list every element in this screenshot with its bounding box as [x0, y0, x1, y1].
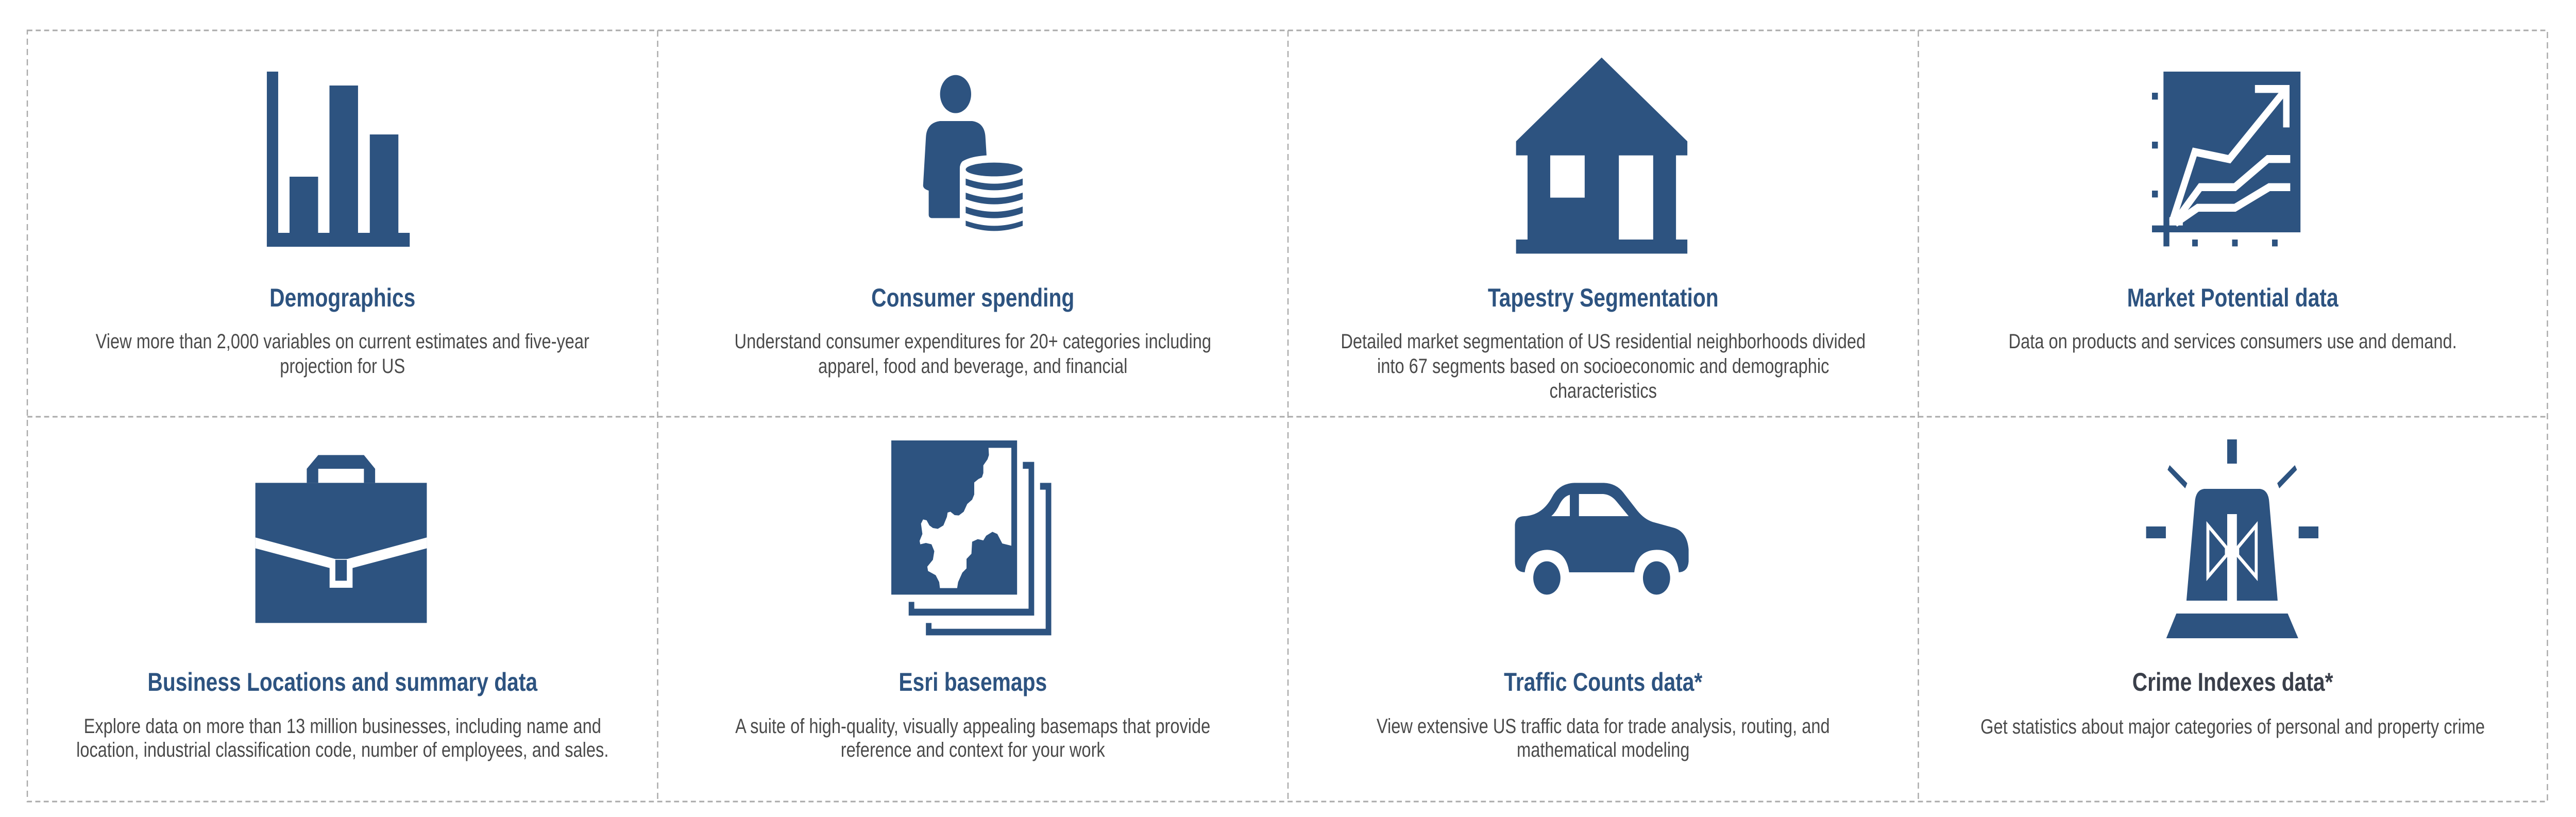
- panel: traffic counts: [1377, 483, 1830, 761]
- heading: Market Potential data: Market Potential data: [2127, 283, 2338, 312]
- panel: demographics: [96, 72, 589, 378]
- panel: esri basemaps: [735, 440, 1210, 761]
- heading: Business Locations and summary data: Business Locations and summary data: [147, 668, 538, 696]
- text block: business description: location, industrial classification code, number of employees, and sales.: [76, 738, 608, 761]
- text block: business description: Explore data on more than 13 million businesses, including name and: [84, 714, 601, 738]
- text block: market potential description: Data on products and services consumers use and demand.: [2009, 330, 2457, 353]
- heading: Crime Indexes data*: Crime Indexes data*: [2132, 668, 2333, 696]
- text block: consumer spending description: Understand consumer expenditures for 20+ categories including: [735, 330, 1211, 353]
- icon: bar chart: [267, 72, 410, 247]
- icon: siren: [2146, 439, 2318, 638]
- icon: house: [1516, 58, 1687, 253]
- text block: crime description: Get statistics about major categories of personal and property crime: [1980, 715, 2485, 738]
- text block: tapestry description: Detailed market segmentation of US residential neighborhoods divided: [1341, 330, 1866, 353]
- text block: demographics description: View more than 2,000 variables on current estimates and five-year: [96, 330, 589, 353]
- icon: stacked maps: [891, 440, 1052, 635]
- text block: basemaps description: reference and context for your work: [841, 738, 1105, 761]
- text block: tapestry description: characteristics: [1550, 379, 1657, 402]
- icon: car: [1515, 483, 1689, 594]
- text block: traffic description: View extensive US traffic data for trade analysis, routing, and: [1377, 714, 1830, 738]
- icon: person with coins: [923, 75, 1023, 231]
- text block: demographics description: projection for US: [280, 354, 405, 378]
- text block: consumer spending description: apparel, food and beverage, and financial: [818, 354, 1127, 378]
- icon: growth chart: [2152, 72, 2300, 246]
- heading: Demographics: Demographics: [269, 283, 415, 312]
- text block: basemaps description: A suite of high-quality, visually appealing basemaps that provide: [735, 714, 1210, 738]
- panel: consumer spending: [735, 75, 1211, 378]
- heading: Consumer spending: Consumer spending: [871, 283, 1074, 312]
- icon: briefcase: [256, 455, 427, 623]
- text block: tapestry description: into 67 segments based on socioeconomic and demographic: [1377, 354, 1829, 378]
- heading: Traffic Counts data*: Traffic Counts data*: [1504, 668, 1703, 696]
- panel: tapestry segmentation: [1341, 58, 1866, 402]
- panel: market potential: [2009, 72, 2457, 353]
- heading: Tapestry Segmentation: Tapestry Segmentation: [1488, 283, 1719, 312]
- text block: traffic description: mathematical modeling: [1517, 738, 1689, 761]
- panel: crime indexes: [1980, 439, 2485, 738]
- panel: business locations: [76, 455, 608, 761]
- heading: Esri basemaps: Esri basemaps: [899, 668, 1047, 696]
